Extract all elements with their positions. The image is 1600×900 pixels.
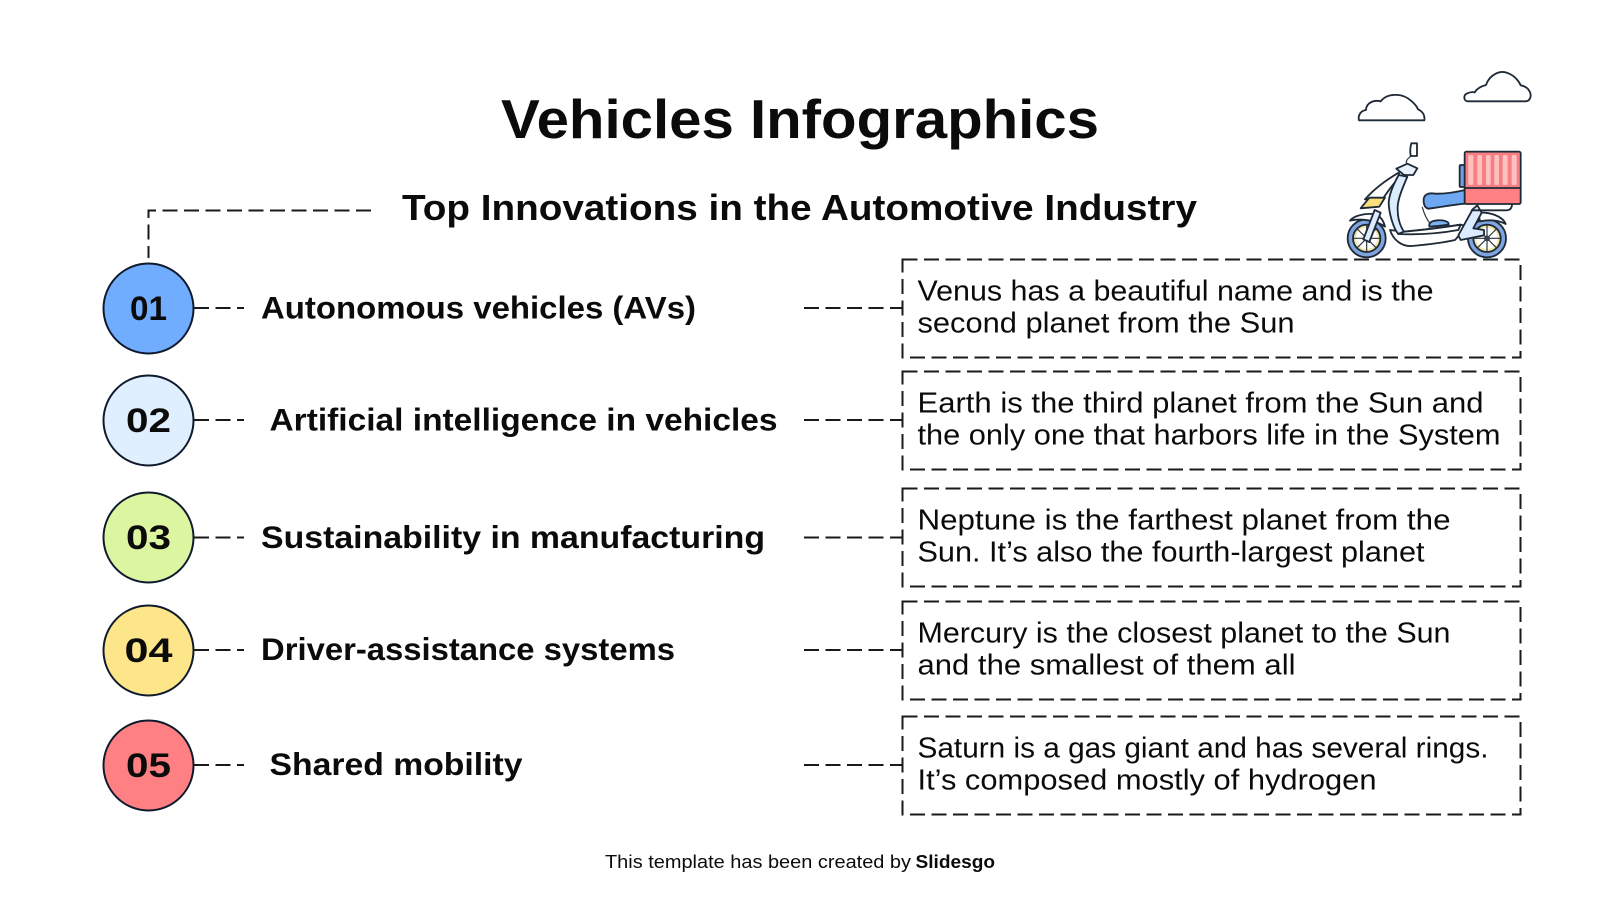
row 2 xyxy=(104,372,1520,470)
leg shield xyxy=(1389,175,1407,234)
rear mudguard xyxy=(1478,213,1506,224)
description box 02 xyxy=(902,372,1520,470)
mirror xyxy=(1410,143,1417,156)
description 05: It’s composed mostly of hydrogen xyxy=(918,764,1376,796)
seat xyxy=(1424,190,1465,209)
delivery box xyxy=(1465,152,1521,204)
icon: right cloud xyxy=(1464,72,1531,101)
number 05: 05 xyxy=(126,747,171,785)
icon: moped xyxy=(1348,143,1521,257)
lower body and floor xyxy=(1390,225,1467,246)
description box 01 xyxy=(902,260,1520,358)
box upper shade xyxy=(1466,153,1520,187)
footer credit: This template has been created by xyxy=(605,852,911,872)
connector xyxy=(804,307,902,309)
seat support xyxy=(1422,207,1430,223)
subtitle: Top Innovations in the Automotive Industry xyxy=(402,187,1198,228)
front panel xyxy=(1365,173,1400,199)
description 04: and the smallest of them all xyxy=(918,650,1296,682)
label 02: Artificial intelligence in vehicles xyxy=(270,402,778,438)
connector xyxy=(194,419,244,421)
description 01: Venus has a beautiful name and is the xyxy=(918,276,1434,308)
footer credit: Slidesgo xyxy=(916,852,995,872)
label 04: Driver-assistance systems xyxy=(261,631,675,667)
number 01: 01 xyxy=(130,290,167,328)
connector xyxy=(194,649,244,651)
circle 02 xyxy=(104,376,194,466)
headlight xyxy=(1361,198,1385,208)
description 05: Saturn is a gas giant and has several rings. xyxy=(918,732,1488,764)
description 03: Neptune is the farthest planet from the xyxy=(918,504,1450,536)
box back pad xyxy=(1460,165,1465,187)
description box 04 xyxy=(902,602,1520,700)
rear frame xyxy=(1458,205,1484,240)
description 01: second planet from the Sun xyxy=(918,308,1294,340)
illustration: clouds and moped xyxy=(1348,72,1531,257)
description 02: Earth is the third planet from the Sun and xyxy=(918,388,1484,420)
connector xyxy=(804,764,902,766)
label 01: Autonomous vehicles (AVs) xyxy=(261,290,696,326)
front mudguard xyxy=(1350,214,1385,227)
description box 03 xyxy=(902,488,1520,586)
row 4 xyxy=(104,602,1520,700)
row 1 xyxy=(104,260,1520,358)
description box 05 xyxy=(902,716,1520,814)
description 04: Mercury is the closest planet to the Sun xyxy=(918,618,1450,650)
floor panel xyxy=(1398,225,1461,234)
handlebar xyxy=(1396,164,1417,175)
number 02: 02 xyxy=(126,402,171,440)
connector xyxy=(194,307,244,309)
connector: subtitle to first circle xyxy=(148,210,371,258)
description 02: the only one that harbors life in the System xyxy=(918,420,1500,452)
box divider xyxy=(1465,185,1521,191)
circle 04 xyxy=(104,606,194,696)
connector xyxy=(804,536,902,538)
row 5 xyxy=(104,716,1520,814)
connector xyxy=(194,764,244,766)
number 03: 03 xyxy=(126,519,171,557)
description 03: Sun. It’s also the fourth-largest planet xyxy=(918,536,1425,568)
circle 05 xyxy=(104,720,194,810)
connector xyxy=(804,649,902,651)
mirror stem xyxy=(1406,155,1411,164)
row 3 xyxy=(104,488,1520,586)
icon: left cloud xyxy=(1359,95,1424,120)
connector xyxy=(194,536,244,538)
icon: front wheel xyxy=(1348,219,1386,257)
rack xyxy=(1472,204,1512,210)
title: Vehicles Infographics xyxy=(501,89,1099,150)
number 04: 04 xyxy=(124,632,173,670)
fork xyxy=(1363,210,1381,242)
footrest xyxy=(1429,220,1449,227)
circle 03 xyxy=(104,492,194,582)
label 05: Shared mobility xyxy=(270,746,523,782)
icon: rear wheel xyxy=(1468,219,1506,257)
circle 01 xyxy=(104,264,194,354)
label 03: Sustainability in manufacturing xyxy=(261,519,765,555)
connector xyxy=(804,419,902,421)
box stripes xyxy=(1468,155,1517,185)
